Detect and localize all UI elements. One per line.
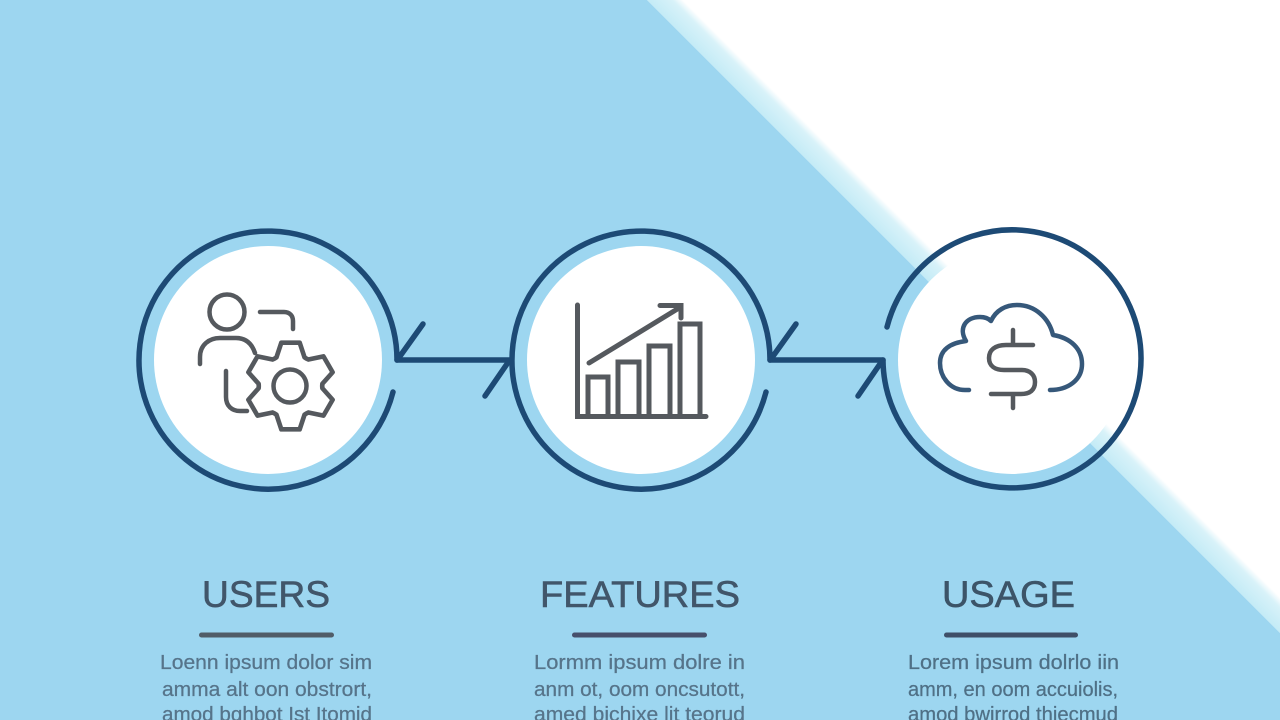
diagonal light band bbox=[647, 0, 1280, 633]
ring bbox=[139, 231, 397, 489]
heading: features: FEATURES bbox=[540, 574, 740, 615]
body text: Lorem ipsum dolrlo iin bbox=[908, 652, 1119, 674]
icon: bar chart with rising arrow bbox=[578, 305, 706, 416]
column: usage text bbox=[908, 574, 1119, 720]
column: features text bbox=[534, 574, 745, 720]
heading rule bbox=[199, 632, 334, 638]
ring bbox=[883, 230, 1141, 488]
connector arrow: features to users bbox=[397, 324, 510, 396]
body text: anm ot, oom oncsutott, bbox=[534, 679, 745, 701]
heading: users: USERS bbox=[202, 574, 330, 615]
white disc bbox=[527, 246, 755, 474]
heading rule bbox=[944, 632, 1078, 638]
step: features circle bbox=[512, 231, 770, 489]
ring bbox=[512, 231, 770, 489]
step: users circle bbox=[139, 231, 397, 489]
heading: usage: USAGE bbox=[942, 574, 1075, 615]
body text: amma alt oon obstrort, bbox=[162, 679, 372, 701]
icon: cloud with dollar sign bbox=[940, 305, 1082, 408]
connector arrow: usage to features bbox=[770, 324, 883, 396]
body text bbox=[160, 652, 372, 720]
step: usage circle bbox=[883, 230, 1141, 488]
heading rule bbox=[572, 632, 707, 638]
white disc bbox=[154, 246, 382, 474]
icon: user with gear bbox=[200, 294, 333, 429]
body text bbox=[534, 652, 745, 720]
body text: Lormm ipsum dolre in bbox=[534, 652, 745, 674]
body text bbox=[908, 652, 1119, 720]
white disc bbox=[898, 246, 1126, 474]
body text: Loenn ipsum dolor sim bbox=[160, 652, 372, 674]
body text: amm, en oom accuiolis, bbox=[908, 679, 1118, 701]
column: users text bbox=[160, 574, 372, 720]
